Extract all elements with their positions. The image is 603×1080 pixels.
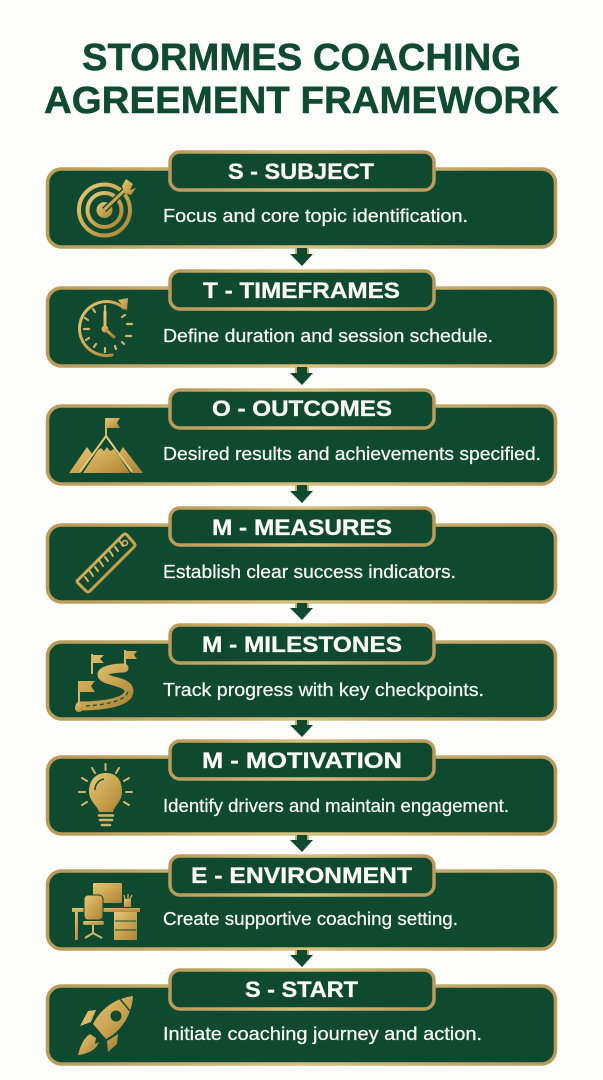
tab heading: M - Milestones: M - MILESTONES	[202, 632, 402, 657]
arrow: M to M 2	[290, 720, 313, 737]
title: STORMMES COACHING	[82, 37, 521, 79]
description: Create supportive coaching setting.	[163, 908, 458, 929]
arrow: M to E	[290, 835, 313, 852]
arrow: S to T	[290, 248, 313, 266]
icon: light bulb	[79, 764, 132, 825]
icon: clock	[80, 298, 132, 356]
panel: M - Milestones	[48, 625, 556, 719]
tab heading: E - Environment	[170, 856, 434, 895]
tab heading: S - Start: S - START	[245, 977, 359, 1002]
tab heading: S - Start	[170, 970, 434, 1009]
description: Focus and core topic identification.	[163, 205, 468, 226]
icon: rocket	[78, 996, 133, 1055]
tab heading: M - Measures	[170, 508, 434, 545]
tab heading: S - Subject: S - SUBJECT	[228, 159, 375, 184]
arrow: T to O	[290, 367, 313, 385]
description: Define duration and session schedule.	[163, 325, 493, 346]
description: Desired results and achievements specified.	[163, 443, 541, 464]
tab heading: M - Milestones	[170, 625, 434, 663]
panel: M - Motivation	[48, 741, 556, 834]
tab heading: M - Motivation	[170, 741, 434, 779]
title	[44, 37, 560, 122]
tab heading: O - Outcomes: O - OUTCOMES	[212, 396, 392, 421]
icon: winding road with flags	[75, 650, 137, 712]
panel: S - Start	[48, 970, 556, 1064]
panel: O - Outcomes	[48, 390, 556, 484]
panel: E - Environment	[48, 856, 556, 949]
arrow: E to S	[290, 950, 313, 967]
icon: office desk and chair	[72, 883, 140, 940]
tab heading: M - Motivation: M - MOTIVATION	[202, 748, 402, 773]
arrow: O to M	[290, 485, 313, 503]
arrow: M to M	[290, 603, 313, 620]
panel: T - Timeframes	[48, 271, 556, 366]
icon: target with arrow	[79, 179, 136, 236]
tab heading: S - Subject	[170, 152, 434, 190]
description: Establish clear success indicators.	[163, 561, 456, 582]
icon: ruler	[77, 534, 135, 592]
tab heading: E - Environment: E - ENVIRONMENT	[191, 863, 413, 888]
panel: M - Measures	[48, 508, 556, 602]
tab heading: T - Timeframes: T - TIMEFRAMES	[203, 278, 400, 303]
description: Track progress with key checkpoints.	[163, 679, 484, 700]
description: Identify drivers and maintain engagement.	[163, 795, 509, 816]
icon: mountain with flag	[69, 418, 143, 473]
tab heading: M - Measures: M - MEASURES	[212, 515, 392, 540]
title: AGREEMENT FRAMEWORK	[44, 80, 560, 122]
description: Initiate coaching journey and action.	[163, 1023, 482, 1044]
panel: S - Subject	[48, 152, 556, 247]
tab heading: O - Outcomes	[170, 390, 434, 428]
tab heading: T - Timeframes	[170, 271, 434, 309]
